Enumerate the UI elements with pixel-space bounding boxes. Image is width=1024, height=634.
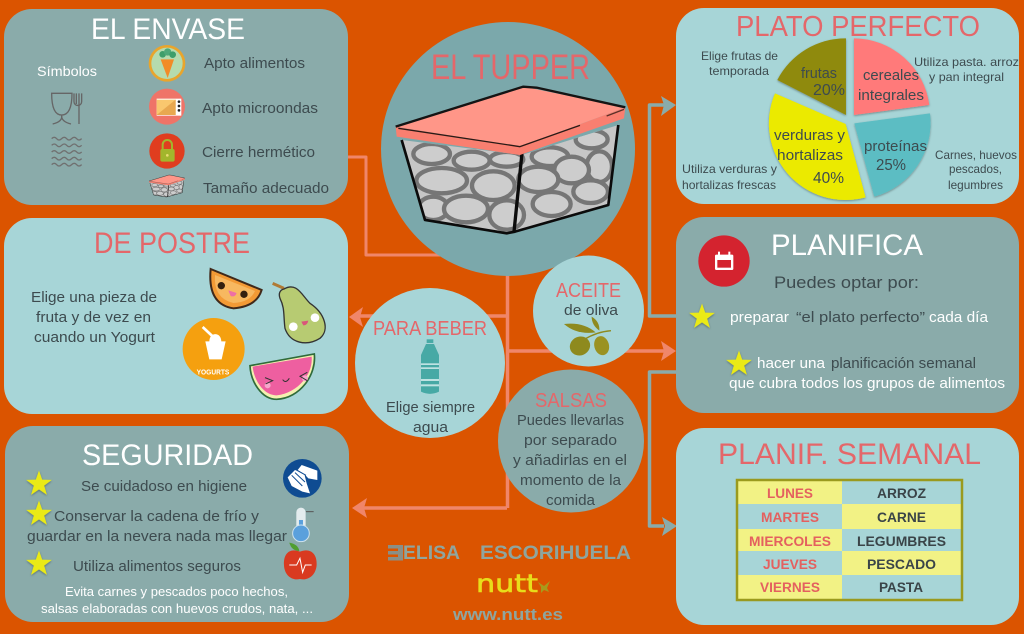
text: puedes optar: Puedes optar por: xyxy=(774,273,919,292)
icon: yogurt xyxy=(183,318,245,380)
text: option 1: preparar xyxy=(730,309,789,326)
icon: freezer waves xyxy=(52,137,82,166)
note: proteinas: Carnes, huevos xyxy=(935,148,1017,162)
text: option 2: hacer una xyxy=(757,355,826,372)
note: cereales: Utiliza pasta. arroz xyxy=(914,55,1019,69)
text: evita carnes xyxy=(41,584,313,616)
pie labels xyxy=(774,65,927,187)
heading: el tupper: EL TUPPER xyxy=(431,48,590,87)
pie labels: 20% xyxy=(813,82,845,99)
text: cadena de frio: Conservar la cadena de frío y xyxy=(54,508,260,525)
logo: nutt xyxy=(476,569,550,598)
text: cadena de frio xyxy=(27,508,287,545)
text: postre advice xyxy=(31,289,157,346)
text: postre advice: cuando un Yogurt xyxy=(34,329,156,346)
icon: apple xyxy=(284,543,317,579)
icon: calendar xyxy=(698,235,750,287)
pie labels: hortalizas xyxy=(777,147,843,164)
note: cereales xyxy=(914,55,1019,84)
text: salsas advice: momento de la xyxy=(520,472,622,489)
table: weekly plan: MIERCOLES xyxy=(749,534,831,549)
heading: plato perfecto: PLATO PERFECTO xyxy=(736,11,980,43)
note: verduras xyxy=(682,162,777,192)
text: salsas advice xyxy=(513,412,627,509)
text: option 1: cada día xyxy=(929,309,989,326)
icon: water bottle xyxy=(421,339,439,394)
table: weekly plan: JUEVES xyxy=(763,557,817,572)
text: option 2 xyxy=(729,355,1005,392)
table: weekly plan: ARROZ xyxy=(877,486,926,501)
text: elige agua xyxy=(386,399,475,436)
text: option 1: “el plato perfecto” xyxy=(796,309,925,326)
heading: planif. semanal: PLANIF. SEMANAL xyxy=(718,438,981,471)
icon: orange slice xyxy=(210,269,262,308)
text: salsas advice: comida xyxy=(546,492,596,509)
note: verduras: Utiliza verduras y xyxy=(682,162,777,176)
icon: watermelon xyxy=(250,354,315,399)
heading: para beber: PARA BEBER xyxy=(373,318,487,340)
label: apto alimentos: Apto alimentos xyxy=(204,55,305,72)
text: salsas advice: Puedes llevarlas xyxy=(517,412,624,429)
table: weekly plan: MARTES xyxy=(761,510,819,525)
connector: planifica to plato perfecto xyxy=(650,96,676,316)
icon: padlock xyxy=(149,133,185,169)
connector: planifica to planif. semanal xyxy=(650,372,677,536)
label: cierre hermetico: Cierre hermético xyxy=(202,144,315,161)
circle: el tupper xyxy=(381,22,635,276)
credit: author logo mark xyxy=(388,545,403,560)
table: weekly plan: LEGUMBRES xyxy=(857,534,946,549)
text: option 1 xyxy=(730,309,989,326)
icon: star 2 xyxy=(26,500,52,525)
table: weekly plan: CARNE xyxy=(877,510,926,525)
text: option 2: planificación semanal xyxy=(831,355,976,372)
icon: pear xyxy=(273,283,325,343)
icon: star 3 xyxy=(26,550,52,575)
pie labels: 40% xyxy=(813,170,844,187)
heading: planifica: PLANIFICA xyxy=(771,229,923,262)
text: de oliva: de oliva xyxy=(564,302,619,319)
panel: plato perfecto xyxy=(676,8,1019,204)
label: simbolos: Símbolos xyxy=(37,63,97,79)
note: verduras: hortalizas frescas xyxy=(682,178,776,192)
credit: author name: ESCORIHUELA xyxy=(480,543,631,564)
text: salsas advice: por separado xyxy=(524,432,617,449)
icon: star 1 xyxy=(26,470,52,495)
icon: yogurt: YOGURTS xyxy=(197,367,229,376)
pie labels: proteínas xyxy=(864,138,927,155)
icon: wine glass and fork xyxy=(52,93,82,124)
slice: frutas xyxy=(777,38,846,115)
note: proteinas xyxy=(935,148,1017,192)
pie labels: 25% xyxy=(876,157,906,174)
heading: de postre: DE POSTRE xyxy=(94,227,250,260)
table: weekly plan: PASTA xyxy=(879,580,923,595)
pie chart xyxy=(769,38,931,200)
panel: el envase xyxy=(4,9,348,205)
panel: de postre xyxy=(4,218,348,414)
note: frutas xyxy=(701,49,778,78)
circle: salsas xyxy=(498,370,644,512)
icon: olives xyxy=(564,317,611,359)
connector: tupper trunk with branches and arrows xyxy=(349,270,676,518)
icon: microwave xyxy=(149,89,185,125)
text: elige agua: agua xyxy=(413,419,449,436)
pie labels: cereales xyxy=(863,67,919,84)
credit: author name xyxy=(403,543,631,564)
panel: seguridad xyxy=(5,426,349,622)
slice: verduras xyxy=(769,93,866,200)
icon: thermometer xyxy=(293,508,314,542)
table: weekly plan xyxy=(737,480,962,600)
icon: small tupper xyxy=(149,175,185,197)
text: postre advice: fruta y de vez en xyxy=(36,309,151,326)
circle: para beber xyxy=(355,288,505,438)
pie labels: verduras y xyxy=(774,127,846,144)
slice: proteinas xyxy=(854,113,931,197)
icon: star option 2 xyxy=(726,350,752,375)
icon: star option 1 xyxy=(689,304,715,328)
logo: nutt: nutt xyxy=(476,569,538,598)
text: evita carnes: Evita carnes y pescados poco hechos, xyxy=(65,584,288,599)
panel: planifica xyxy=(676,217,1019,413)
icon: tupper box xyxy=(396,87,625,233)
slice: cereales xyxy=(854,38,929,115)
text: postre advice: Elige una pieza de xyxy=(31,289,157,306)
pie labels: integrales xyxy=(858,87,924,104)
table: weekly plan: PESCADO xyxy=(867,557,936,572)
circle: aceite xyxy=(533,256,644,366)
pie labels: frutas xyxy=(801,65,837,82)
label: apto microondas: Apto microondas xyxy=(202,100,318,117)
text: cadena de frio: guardar en la nevera nada mas llegar xyxy=(27,528,287,545)
note: frutas: temporada xyxy=(709,64,769,78)
icon: hand washing xyxy=(283,459,322,498)
connector: tupper to El Envase xyxy=(346,157,445,255)
note: frutas: Elige frutas de xyxy=(701,49,778,63)
text: salsas advice: y añadirlas en el xyxy=(513,452,627,469)
heading: el envase: EL ENVASE xyxy=(91,13,245,46)
panel: planif. semanal xyxy=(676,428,1019,625)
text: elige agua: Elige siempre xyxy=(386,399,475,416)
note: cereales: y pan integral xyxy=(929,70,1004,84)
text: evita carnes: salsas elaboradas con huevos crudos, nata, ... xyxy=(41,601,313,616)
heading: aceite: ACEITE xyxy=(556,280,621,302)
credit: website: www.nutt.es xyxy=(452,605,563,624)
text: option 2: que cubra todos los grupos de alimentos xyxy=(729,375,1005,392)
text: alimentos seguros: Utiliza alimentos seguros xyxy=(73,558,241,575)
credit: author name: ELISA xyxy=(403,543,460,564)
text: higiene: Se cuidadoso en higiene xyxy=(81,478,247,495)
note: proteinas: pescados, xyxy=(949,162,1002,176)
heading: salsas: SALSAS xyxy=(535,390,607,412)
table: weekly plan: LUNES xyxy=(767,486,813,501)
note: proteinas: legumbres xyxy=(948,178,1003,192)
heading: seguridad: SEGURIDAD xyxy=(82,439,253,472)
label: tamano adecuado: Tamaño adecuado xyxy=(203,180,329,197)
icon: carrot xyxy=(149,45,185,82)
table: weekly plan: VIERNES xyxy=(760,580,820,595)
